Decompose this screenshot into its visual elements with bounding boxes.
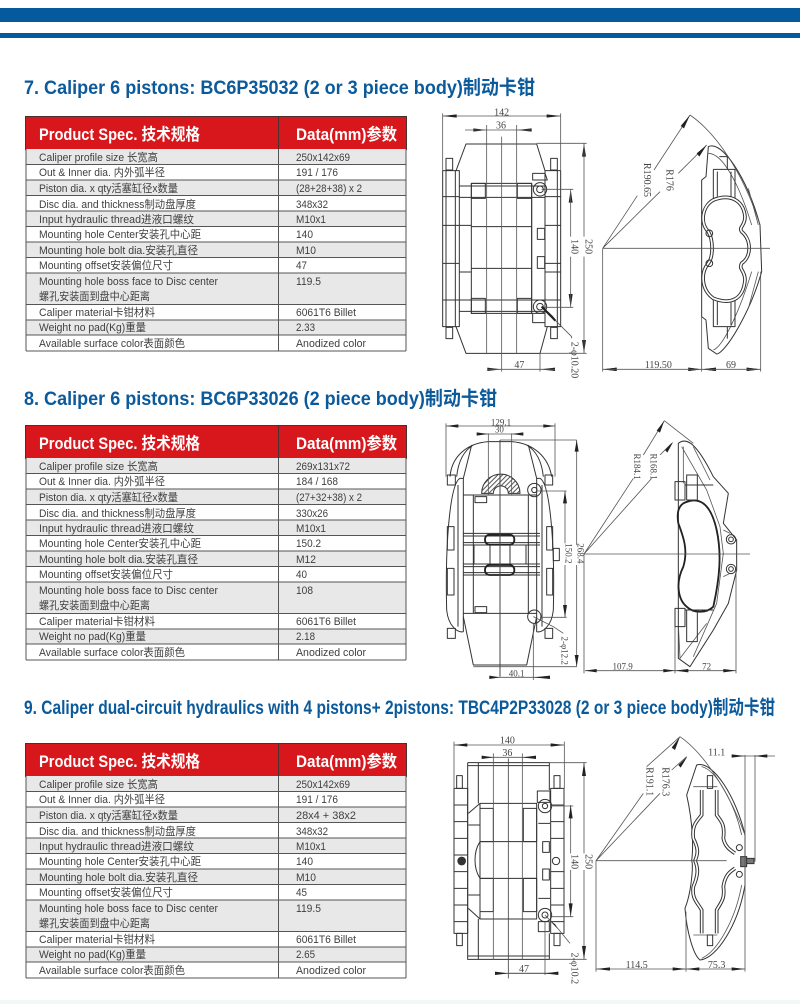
- table rows: Caliper profile size 长宽高: [39, 777, 158, 791]
- front view dimensions: 142: [494, 107, 509, 118]
- technical drawing: section 7 caliper: [443, 107, 770, 378]
- table rows: 2.33: [296, 322, 315, 334]
- table rows: Mounting hole boss face to Disc center: [39, 903, 218, 915]
- heading: section 7: 7. Caliper 6 pistons: BC6P35032 (2 or 3 piece body)制动卡钳: [24, 77, 535, 99]
- table rows: 28x4 + 38x2: [296, 810, 356, 822]
- table rows: [26, 149, 406, 351]
- side view dimensions: 72: [702, 661, 711, 671]
- table rows: 191 / 176: [296, 794, 338, 806]
- table rows: Available surface color表面颜色: [39, 336, 185, 350]
- table rows: M12: [296, 554, 316, 566]
- table rows: 184 / 168: [296, 476, 338, 488]
- table rows: Caliper material卡钳材料: [39, 932, 155, 946]
- table rows: 348x32: [296, 826, 328, 838]
- table rows: Available surface color表面颜色: [39, 963, 185, 977]
- table rows: Weight no pad(Kg)重量: [39, 629, 146, 643]
- table rows: Anodized color: [296, 647, 366, 659]
- front view dimensions: 150.2: [564, 543, 574, 563]
- table rows: 6061T6 Billet: [296, 934, 356, 946]
- side view: [675, 441, 737, 667]
- top header rule: [0, 33, 800, 38]
- side view dimensions: 107.9: [613, 661, 633, 671]
- table header: Data(mm)参数: [296, 433, 397, 453]
- side view dimensions: [584, 421, 750, 673]
- table rows: 250x142x69: [296, 779, 350, 791]
- front view dimensions: 129.1: [491, 417, 511, 427]
- table rows: Weight no pad(Kg)重量: [39, 320, 146, 334]
- table rows: 2.18: [296, 631, 315, 643]
- table: section 7 specs: [26, 116, 406, 351]
- table rows: Out & Inner dia. 内外弧半径: [39, 474, 165, 488]
- front view dimensions: 268.4: [576, 543, 586, 564]
- table header: Data(mm)参数: [296, 751, 397, 771]
- table rows: 6061T6 Billet: [296, 307, 356, 319]
- table rows: Input hydraulic thread进液口螺纹: [39, 212, 194, 226]
- table rows: Anodized color: [296, 338, 366, 350]
- table rows: Caliper profile size 长宽高: [39, 150, 158, 164]
- table rows: 269x131x72: [296, 461, 350, 473]
- front view dimensions: 30: [495, 425, 504, 435]
- front view dimensions: 47: [514, 360, 524, 371]
- table rows: Weight no pad(Kg)重量: [39, 947, 146, 961]
- front view dimensions: 140: [568, 239, 579, 254]
- side view dimensions: [603, 115, 770, 372]
- table rows: Available surface color表面颜色: [39, 645, 185, 659]
- table: section 9 specs: [26, 743, 406, 978]
- table rows: Mounting offset安装偏位尺寸: [39, 258, 173, 272]
- side view dimensions: R191.1: [644, 767, 655, 796]
- table: section 8 specs: [26, 425, 406, 660]
- table rows: (28+28+38) x 2: [296, 183, 362, 195]
- front view dimensions: [446, 417, 586, 680]
- table rows: Mounting hole boss face to Disc center: [39, 276, 218, 288]
- front view dimensions: 36: [502, 748, 512, 759]
- side view dimensions: 11.1: [708, 748, 725, 759]
- table rows: 119.5: [296, 903, 321, 915]
- front view dimensions: 140: [500, 735, 515, 746]
- front view dimensions: 2-φ10.2: [568, 953, 579, 984]
- table rows: 250x142x69: [296, 152, 350, 164]
- table rows: Out & Inner dia. 内外弧半径: [39, 792, 165, 806]
- side view dimensions: [596, 737, 775, 972]
- table rows: 119.5: [296, 276, 321, 288]
- technical drawing: section 9 caliper: [454, 735, 775, 984]
- table rows: M10x1: [296, 214, 326, 226]
- front view dimensions: 40.1: [509, 669, 525, 679]
- table rows: Disc dia. and thickness制动盘厚度: [39, 506, 196, 520]
- table rows: Input hydraulic thread进液口螺纹: [39, 521, 194, 535]
- side view dimensions: 114.5: [626, 960, 648, 971]
- table rows: [26, 776, 406, 978]
- front view dimensions: 250: [582, 854, 593, 869]
- side view dimensions: R184.1: [632, 454, 642, 480]
- front view: [454, 753, 564, 978]
- table rows: 2.65: [296, 949, 315, 961]
- table rows: Mounting hole boss face to Disc center: [39, 585, 218, 597]
- table header: Product Spec. 技术规格: [39, 752, 200, 771]
- table header: [26, 425, 406, 458]
- table rows: Caliper material卡钳材料: [39, 614, 155, 628]
- table rows: [26, 458, 406, 660]
- table rows: M10: [296, 872, 316, 884]
- table rows: Piston dia. x qty活塞缸径x数量: [39, 181, 178, 195]
- table rows: 47: [296, 260, 307, 272]
- front view: [443, 125, 561, 363]
- front view dimensions: 2-φ10.20: [569, 342, 580, 378]
- table rows: Disc dia. and thickness制动盘厚度: [39, 197, 196, 211]
- table rows: 140: [296, 229, 313, 241]
- table rows: M10x1: [296, 841, 326, 853]
- side view dimensions: R176.3: [660, 767, 671, 796]
- table rows: Mounting hole bolt dia.安装孔直径: [39, 870, 198, 884]
- table rows: Anodized color: [296, 965, 366, 977]
- table rows: M10: [296, 245, 316, 257]
- table header: Product Spec. 技术规格: [39, 125, 200, 144]
- table rows: 40: [296, 569, 307, 581]
- table rows: Piston dia. x qty活塞缸径x数量: [39, 808, 178, 822]
- technical drawing: section 8 caliper: [446, 417, 750, 680]
- table rows: Mounting hole Center安装孔中心距: [39, 854, 201, 868]
- table header: Data(mm)参数: [296, 124, 397, 144]
- table rows: 330x26: [296, 508, 328, 520]
- front view dimensions: 36: [496, 121, 506, 132]
- table rows: Caliper material卡钳材料: [39, 305, 155, 319]
- table rows: Caliper profile size 长宽高: [39, 459, 158, 473]
- side view dimensions: 69: [726, 360, 736, 371]
- bottom pale band: [0, 1000, 800, 1004]
- front view dimensions: 47: [519, 964, 529, 975]
- top header band: [0, 8, 800, 22]
- table rows: Mounting hole bolt dia.安装孔直径: [39, 243, 198, 257]
- table rows: Input hydraulic thread进液口螺纹: [39, 839, 194, 853]
- table rows: Mounting offset安装偏位尺寸: [39, 885, 173, 899]
- table rows: (27+32+38) x 2: [296, 492, 362, 504]
- side view dimensions: R176: [664, 169, 675, 191]
- table rows: M10x1: [296, 523, 326, 535]
- front view dimensions: 140: [568, 854, 579, 869]
- front view dimensions: [454, 735, 593, 984]
- table rows: 191 / 176: [296, 167, 338, 179]
- side view dimensions: R190.65: [641, 163, 652, 197]
- side view dimensions: 75.3: [708, 960, 725, 971]
- table rows: Disc dia. and thickness制动盘厚度: [39, 824, 196, 838]
- table rows: Mounting hole Center安装孔中心距: [39, 227, 201, 241]
- table rows: 140: [296, 856, 313, 868]
- front view dimensions: 2-φ12.2: [559, 636, 569, 665]
- side view: [685, 765, 754, 960]
- table rows: Mounting hole Center安装孔中心距: [39, 536, 201, 550]
- table rows: 150.2: [296, 538, 321, 550]
- table rows: Mounting hole bolt dia.安装孔直径: [39, 552, 198, 566]
- table header: [26, 743, 406, 776]
- table rows: 螺孔安装面到盘中心距离: [39, 598, 150, 612]
- side view dimensions: R168.1: [649, 454, 659, 480]
- table rows: 螺孔安装面到盘中心距离: [39, 289, 150, 303]
- table rows: 348x32: [296, 199, 328, 211]
- side view dimensions: 119.50: [645, 360, 672, 371]
- table rows: Out & Inner dia. 内外弧半径: [39, 165, 165, 179]
- table rows: Mounting offset安装偏位尺寸: [39, 567, 173, 581]
- front view dimensions: [443, 107, 761, 378]
- table rows: 螺孔安装面到盘中心距离: [39, 916, 150, 930]
- table rows: 108: [296, 585, 313, 597]
- table rows: Piston dia. x qty活塞缸径x数量: [39, 490, 178, 504]
- table rows: 6061T6 Billet: [296, 616, 356, 628]
- table header: Product Spec. 技术规格: [39, 434, 200, 453]
- side view: [702, 146, 762, 354]
- front view: [446, 433, 559, 677]
- heading: section 8: 8. Caliper 6 pistons: BC6P33026 (2 piece body)制动卡钳: [24, 388, 497, 410]
- table header: [26, 116, 406, 150]
- table rows: 45: [296, 887, 307, 899]
- front view dimensions: 250: [583, 239, 594, 254]
